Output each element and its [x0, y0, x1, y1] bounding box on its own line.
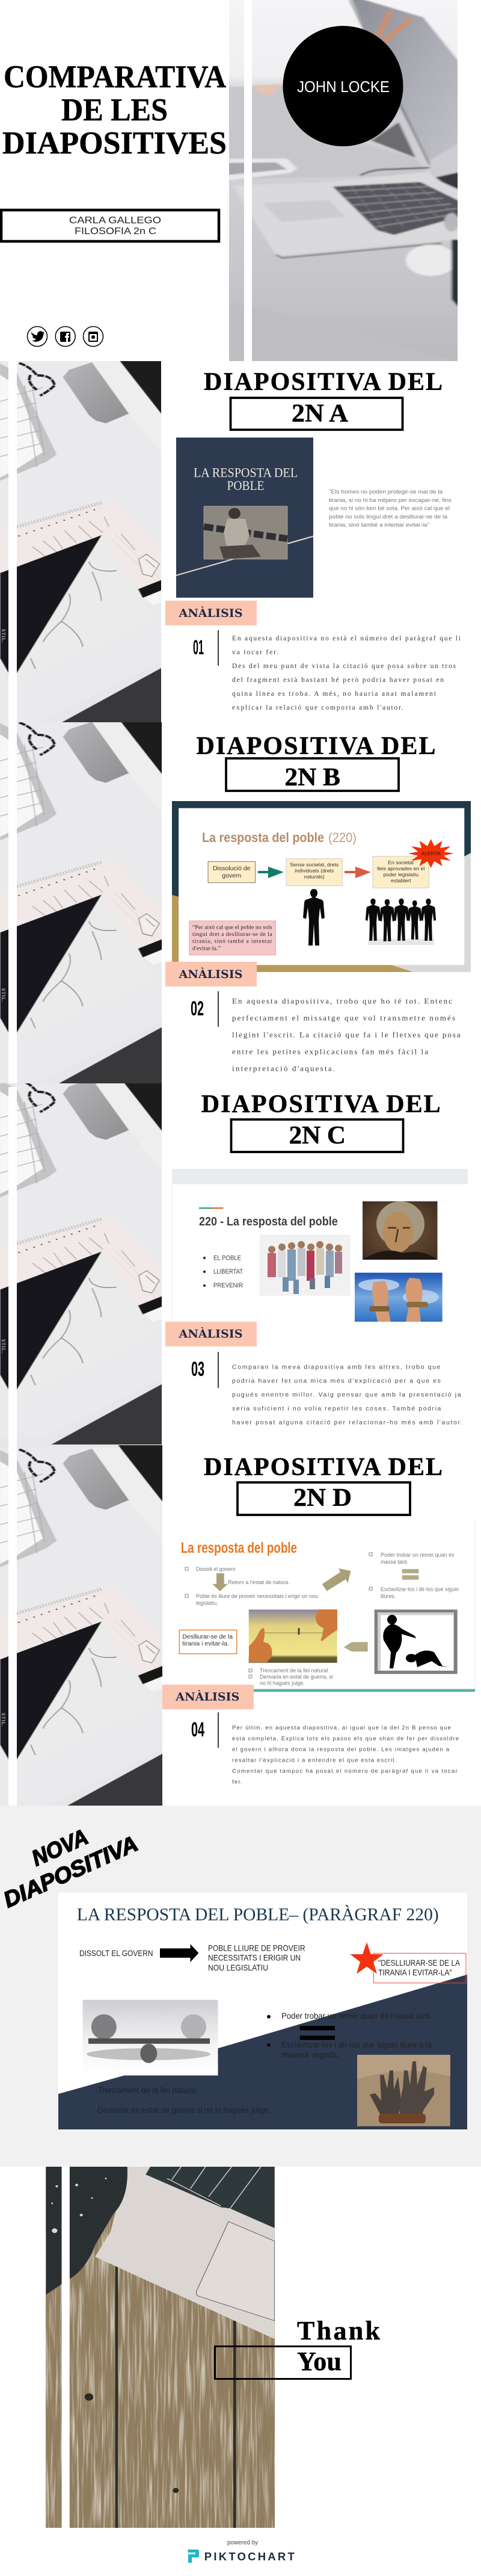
quote: "Els homes no poden protegir-se mai de la: [329, 489, 443, 495]
panel: diapositiva 2n D: [0, 1443, 475, 1821]
bullets: [267, 2011, 432, 2060]
left bullets: [185, 1566, 318, 1607]
right bullets: Poder trobar un remei quan és: [381, 1552, 455, 1558]
bottom bullets: no hi hagués jutge.: [260, 1680, 305, 1686]
number 01: [193, 630, 218, 666]
analysis text: podria haver fet una mica més d'explicació per a que es: [232, 1377, 441, 1384]
flow box 3: En societat: [388, 859, 414, 865]
lower text: [95, 2085, 271, 2115]
slide A: [176, 438, 313, 598]
left bullets: legislatiu.: [196, 1600, 218, 1607]
quote box: d'evitar-la.”: [192, 946, 221, 952]
class label box: 2N A: [292, 400, 349, 427]
flow box 1: Dissolució de: [213, 865, 251, 872]
author box: CARLA GALLEGO: [69, 215, 161, 226]
arrow: diagonal: [322, 1568, 351, 1591]
thank you text: Thank: [297, 2316, 381, 2345]
analysis text: [232, 635, 461, 711]
photo: desk and notebook: STIL.: [1, 1713, 6, 1727]
class label box: [231, 398, 403, 430]
people free: [208, 1943, 305, 1972]
photo: desk and notebook: STIL.: [1, 629, 6, 643]
flow box 3: lleis aprovades en el: [377, 865, 424, 872]
bullets: EL POBLE: [213, 1254, 241, 1262]
left bullets: Dissolt el govern: [196, 1566, 236, 1573]
class label box: [231, 1119, 403, 1152]
lower text: -Trencament de la llei natural.: [95, 2085, 198, 2095]
analysis tab: ANÀLISIS: [178, 967, 243, 981]
class label box: [226, 758, 399, 791]
analysis tab: [165, 601, 257, 625]
analysis text: resaltar l'explicació i a entendre el que esta escrit.: [232, 1757, 397, 1763]
image: bound hands: [355, 1273, 443, 1322]
number 04: 04: [191, 1718, 204, 1741]
quote: que no hi són ben bé sota. Per això cal que el: [329, 506, 450, 512]
people free: NOU LEGISLATIU: [208, 1963, 268, 1972]
badge: John Locke: JOHN LOCKE: [297, 78, 390, 96]
image: crowd: [260, 1234, 351, 1296]
thank you text: [297, 2316, 381, 2376]
number 02: [191, 991, 218, 1027]
thank you box: [215, 2346, 351, 2379]
arrow: red: [345, 867, 371, 878]
icon: facebook: [55, 326, 75, 347]
analysis text: [232, 1724, 459, 1785]
analysis text: Comentar que tampoc ha posat el número de paràgraf que li va tocar: [232, 1768, 458, 1774]
photo: desk and notebook: [0, 1443, 170, 1821]
arrow: teal: [258, 867, 284, 878]
panel: thank you: [46, 2167, 381, 2528]
panel: diapositiva 2n A: [0, 356, 461, 734]
photo: laptop on desk: [229, 0, 458, 361]
people free: NECESSITATS I ERIGIR UN: [208, 1953, 301, 1963]
bullets: LLIBERTAT: [213, 1268, 243, 1275]
analysis text: esta completa. Explica tots els pasos els que shan de fer per dissoldre: [232, 1735, 459, 1742]
main title: COMPARATIVA: [4, 60, 226, 94]
slide B: La resposta del poble: [202, 830, 324, 845]
right bullets: massa tard.: [381, 1559, 408, 1565]
quote: tirania, si no hi ha mitjans per escapar-ne, fins: [329, 497, 452, 504]
rotated heading: NOVA: [28, 1824, 92, 1871]
arrow: black: [160, 1944, 198, 1962]
image: portrait of John Locke: [363, 1201, 438, 1260]
image: thumbs: [249, 1609, 337, 1663]
main title: [2, 60, 227, 161]
author box: [1, 210, 219, 241]
slide C: 220 - La resposta del poble: [199, 1215, 338, 1228]
quote: [329, 489, 452, 528]
analysis tab: [162, 1685, 254, 1709]
main title: DIAPOSITIVES: [2, 126, 227, 161]
icon: red star: [350, 1942, 384, 1974]
bullets: [203, 1254, 243, 1289]
author box: FILOSOFIA 2n C: [75, 226, 156, 237]
quote box: “Per això cal que el poble no sols: [192, 924, 272, 930]
slide C: [172, 1169, 468, 1322]
alert starburst: [408, 839, 454, 868]
analysis tab: ANÀLISIS: [175, 1690, 239, 1703]
icon: piktochart logo: [188, 2550, 199, 2563]
class label box: 2N D: [293, 1484, 352, 1512]
silhouettes: group: [366, 899, 436, 945]
quote: tirania, sinó també a intentar evitar-la": [329, 522, 429, 528]
slide D: La resposta del poble: [181, 1540, 297, 1556]
slide D: [179, 1520, 475, 1692]
right bullets: [369, 1552, 459, 1600]
class label box: 2N B: [285, 764, 340, 791]
analysis text: llegint l'escrit. La citació que fa i le fletxes que posa: [232, 1030, 461, 1039]
lower text: -Derivaria en estat de guerra si no hi hagués jutge.: [95, 2105, 271, 2115]
panel: diapositiva 2n C: [0, 1073, 468, 1451]
people free: POBLE LLIURE DE PROVEIR: [208, 1943, 305, 1953]
panel: cover: [1, 0, 473, 373]
analysis text: En aquesta diapositiva no està el número del paràgraf que li: [232, 635, 461, 642]
callout box: Deslliurar-se de la: [182, 1633, 233, 1641]
analysis text: seria suficient i no volia repetir les coses. També podria: [232, 1405, 441, 1412]
flow box 3: [373, 856, 429, 888]
number 02: 02: [191, 997, 204, 1020]
left bullets: Poble és lliure de proveir necessitats i erigir un nou: [196, 1593, 318, 1600]
slide B: (220): [328, 830, 357, 845]
bullets: Poder trobar un remei quan és massa tard.: [281, 2011, 432, 2020]
footer: powered by piktochart: [188, 2540, 295, 2563]
slide: white panel: [58, 1893, 467, 2129]
callout box: [179, 1630, 237, 1654]
icon: instagram: [83, 326, 103, 347]
heading: DIAPOSITIVA DEL: [196, 732, 435, 760]
main title: DE LES: [61, 93, 168, 128]
flow box 2: Sense societat, drets: [290, 861, 339, 867]
flow box 3: establert: [391, 878, 411, 884]
dissolved government: DISSOLT EL GOVERN: [79, 1948, 153, 1958]
analysis text: explicar la relació que comporta amb l'autor.: [232, 704, 403, 711]
photo: desk and notebook: [0, 716, 170, 1094]
quote box: TIRANIA I EVITAR-LA": [378, 1968, 452, 1977]
analysis tab: ANÀLISIS: [178, 1327, 243, 1341]
image: balance scale: [83, 2000, 218, 2075]
footer: powered by piktochart: powered by: [227, 2540, 258, 2546]
footer: powered by piktochart: PIKTOCHART: [204, 2550, 295, 2563]
analysis tab: [165, 962, 257, 986]
analysis text: el govern i alhora dona la resposta del poble. Les imatges ajuden a: [232, 1746, 450, 1753]
bottom bullets: Derivaria en estat de guerra, si: [260, 1674, 333, 1680]
class label box: 2N C: [289, 1122, 346, 1150]
analysis text: perfectament el missatge que vol transmetre només: [232, 1014, 455, 1023]
slide B: [172, 801, 471, 972]
slide A: LA RESPOSTA DEL: [194, 465, 298, 480]
thank you text: You: [297, 2347, 342, 2376]
right bullets: Esclavitzar-los i dir-los que siguin: [381, 1586, 459, 1593]
quote: poble no sols tingui dret a deslliurar-se de la: [329, 513, 448, 520]
flow box 2: naturals): [304, 873, 325, 879]
bullets: PREVENIR: [213, 1282, 243, 1289]
analysis text: interpretació d'aquesta.: [232, 1064, 335, 1073]
quote box: [373, 1953, 466, 1983]
analysis text: Per últim, en aquesta diapositiva, al igual que la del 2n B penso que: [232, 1724, 451, 1731]
photo: desk and notebook: STIL.: [1, 1339, 6, 1354]
analysis text: quina línea es troba. A més, no hauria anat malament: [232, 690, 437, 698]
analysis text: fer.: [232, 1779, 242, 1785]
number 03: 03: [191, 1358, 204, 1381]
quote box: tingui dret a deslliurar-se de la: [192, 932, 272, 938]
photo: desk and notebook: [0, 356, 170, 734]
panel: nova diapositiva: [0, 1806, 481, 2167]
analysis text: Comparan la meva diapositiva amb les altres, trobo que: [232, 1364, 441, 1371]
analysis text: Des del meu punt de vista la citació que posa sobre un tros: [232, 663, 456, 670]
quote box: "DESLLIURAR-SE DE LA: [378, 1958, 461, 1968]
badge: John Locke: [283, 26, 403, 146]
analysis text: En aquesta diapositiva, trobo que ho té tot. Entenc: [232, 997, 452, 1006]
image: framed cartoon: [375, 1609, 458, 1674]
photo: desk and notebook: [0, 1073, 170, 1451]
analysis text: haver posat alguna citació per relacionar-ho més amb l'autor.: [232, 1419, 462, 1426]
slide A: POBLE: [227, 478, 265, 493]
flow box 2: individuals (drets: [295, 867, 334, 873]
bottom bullets: [249, 1668, 333, 1686]
analysis text: del fragment està bastant bé però podria haver posat en: [232, 677, 444, 684]
silhouette: individual: [303, 889, 325, 946]
class label box: [237, 1482, 410, 1515]
analysis text: entre les petites explicacions fan més fàcil la: [232, 1047, 428, 1056]
number 04: [191, 1712, 218, 1748]
icon: twitter: [28, 326, 47, 347]
flow box 2: [286, 859, 342, 886]
analysis text: [232, 997, 461, 1073]
photo: laptop on wood: [46, 2167, 275, 2528]
heading: DIAPOSITIVA DEL: [201, 1091, 441, 1118]
bottom bullets: Trencament de la llei natural.: [260, 1668, 329, 1674]
image: chained man: [204, 506, 287, 559]
analysis text: [232, 1364, 462, 1426]
panel: diapositiva 2n B: [0, 716, 471, 1094]
rotated heading: DIAPOSITIVA: [0, 1831, 142, 1912]
flow box 3: poder legislatiu: [383, 872, 418, 878]
social icons: [28, 326, 103, 347]
image: chained hands: [357, 2055, 450, 2126]
photo: desk and notebook: STIL.: [1, 988, 6, 1003]
alert starburst: ALERTA: [421, 850, 441, 856]
left bullets: Retorn a l'estat de natura.: [228, 1579, 290, 1586]
callout box: tirania i evitar-la.: [182, 1640, 229, 1647]
slide title: LA RESPOSTA DEL POBLE– (PARÀGRAF 220): [77, 1905, 439, 1925]
heading: DIAPOSITIVA DEL: [204, 1454, 443, 1481]
quote box: tirania, sinó també a intentar: [192, 939, 272, 945]
analysis tab: ANÀLISIS: [178, 606, 243, 620]
flow box 1: govern: [222, 872, 242, 879]
heading: DIAPOSITIVA DEL: [204, 368, 443, 396]
number 03: [191, 1352, 218, 1388]
analysis text: va tocar fer.: [232, 649, 278, 656]
number 01: 01: [193, 636, 204, 659]
flow box 1: [208, 861, 256, 883]
bullets: mateixa vegada.: [281, 2050, 339, 2060]
right bullets: lliures.: [381, 1593, 396, 1600]
quote box: [189, 921, 275, 955]
arrow: left: [344, 1642, 368, 1652]
analysis tab: [165, 1322, 257, 1346]
analysis text: pugués enentre millor. Vaig pensar que amb la presentació ja: [232, 1392, 461, 1399]
bullets: Esclavitzar-los i dir-los que siguin lliure a la: [281, 2040, 432, 2049]
